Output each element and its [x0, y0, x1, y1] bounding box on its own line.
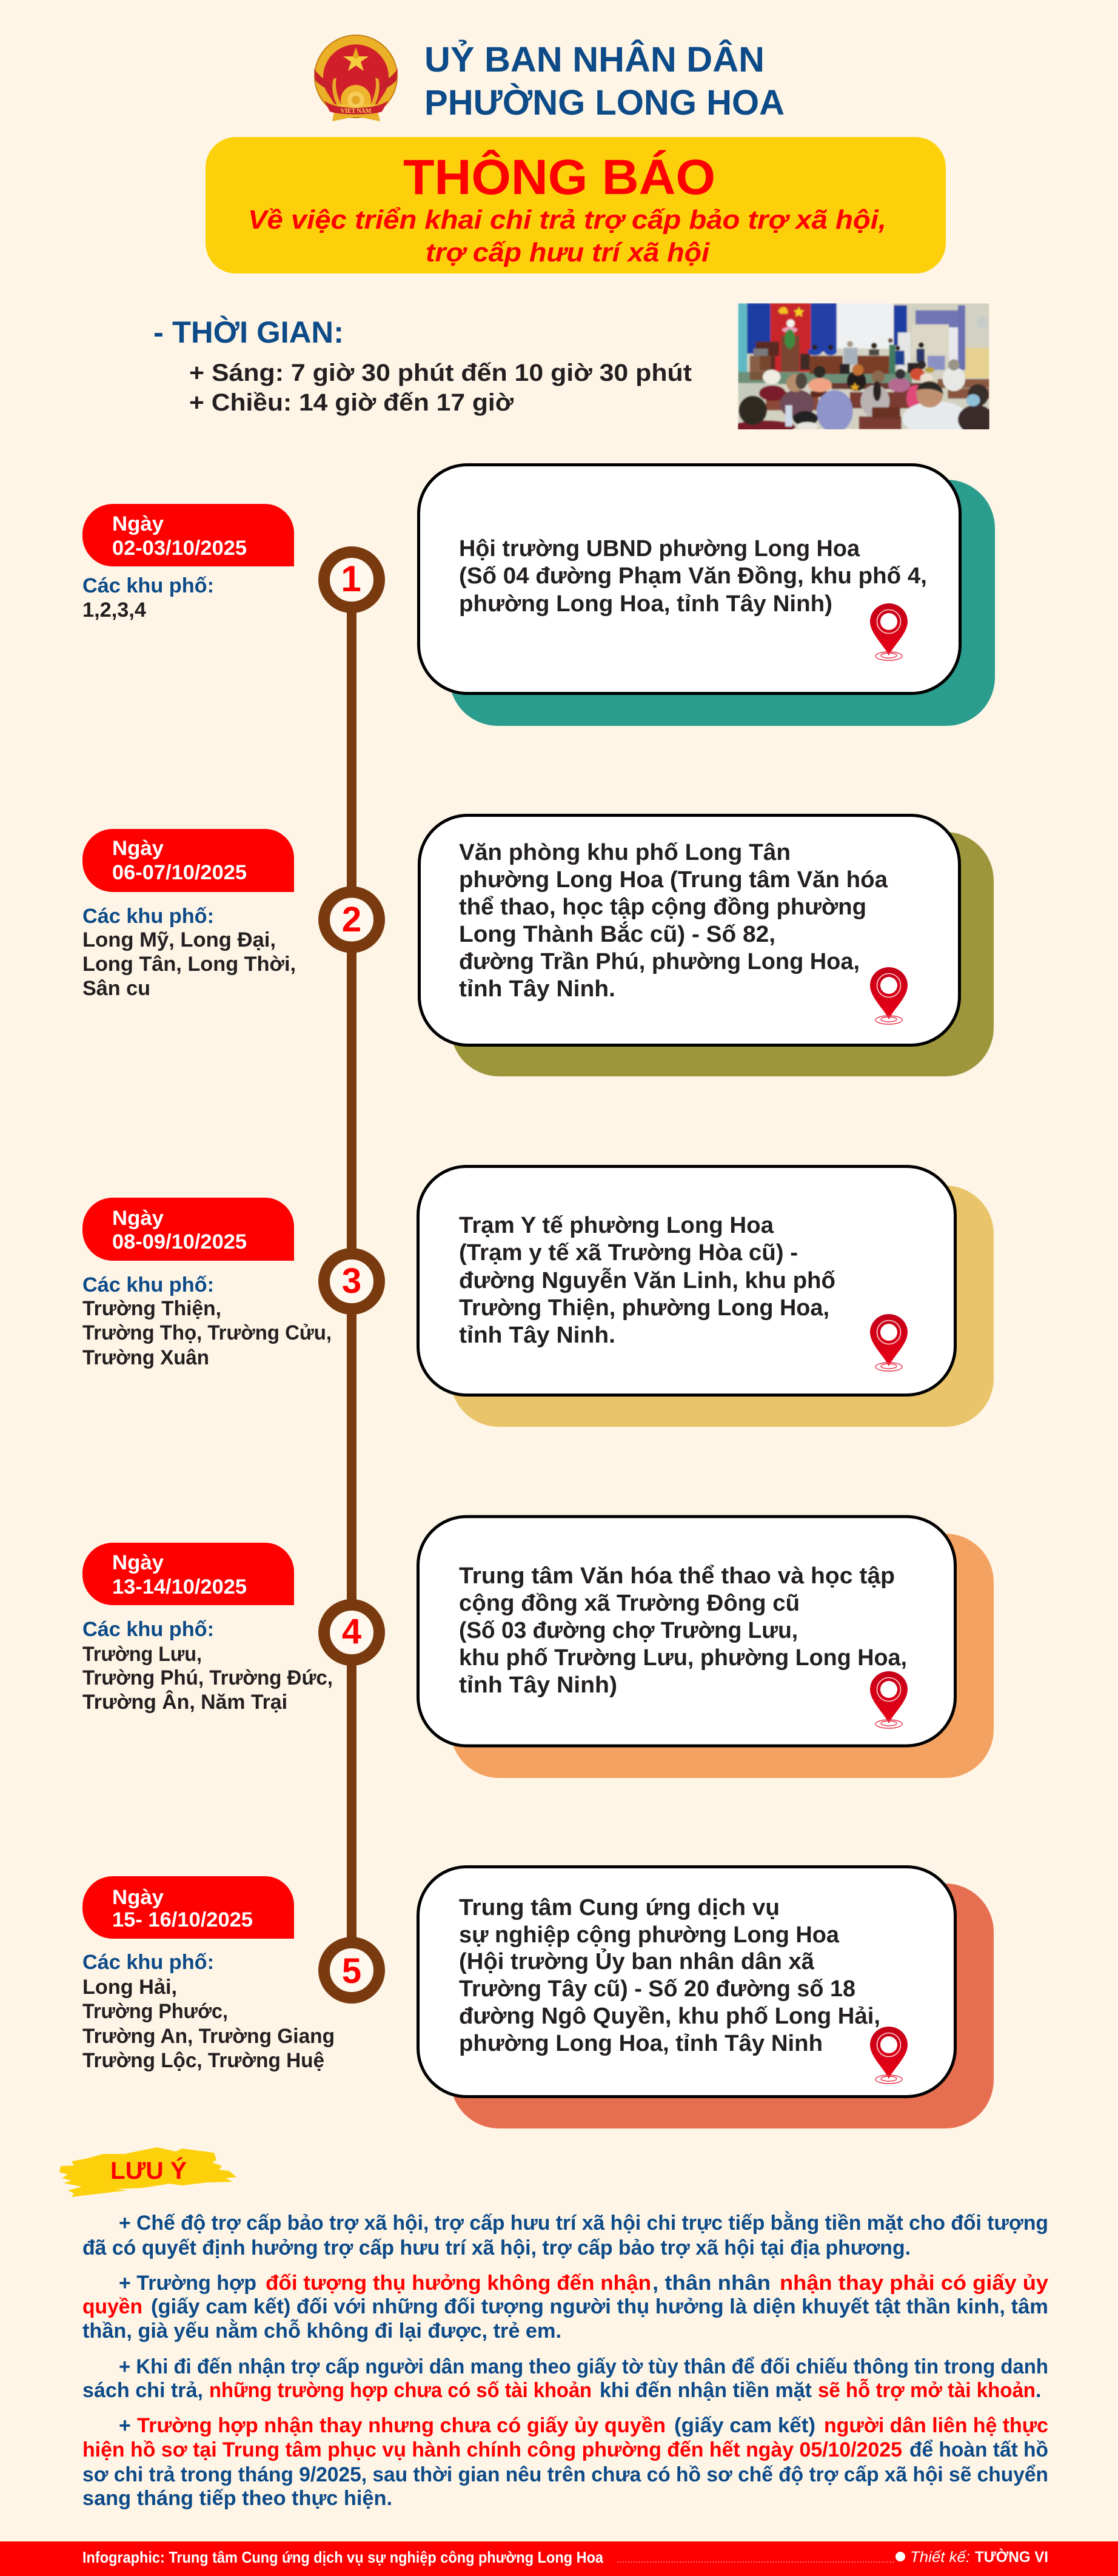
address text: phường Long Hoa, tỉnh Tây Ninh) — [459, 591, 832, 617]
agency name line 2: PHƯỜNG LONG HOA — [424, 83, 785, 122]
neighbourhood label: Các khu phố: — [82, 905, 214, 928]
address text — [459, 1895, 880, 2056]
step 4 — [82, 1517, 994, 1778]
address text: (Số 03 đường chợ Trường Lưu, — [459, 1618, 798, 1643]
number badge — [324, 552, 380, 608]
date text: Ngày — [112, 512, 164, 535]
date value: 08-09/10/2025 — [112, 1230, 247, 1253]
note 3: sẽ hỗ trợ mở tài khoản — [818, 2379, 1036, 2402]
note 4: để hoàn tất hồ — [909, 2438, 1048, 2461]
date value: 02-03/10/2025 — [112, 537, 247, 560]
card shadow — [449, 480, 995, 726]
neighbourhood list — [82, 1297, 332, 1369]
header: emblem and agency name — [314, 35, 785, 122]
address text: đường Ngô Quyền, khu phố Long Hải, — [459, 2004, 880, 2029]
step 3 — [82, 1167, 994, 1427]
address text: Trường Tây cũ) - Số 20 đường số 18 — [459, 1976, 855, 2002]
date text: Ngày — [112, 837, 164, 860]
note 4: (giấy cam kết) — [674, 2414, 815, 2437]
address text: (Hội trường Ủy ban nhân dân xã — [459, 1948, 815, 1974]
photo: meeting hall with residents — [732, 303, 994, 435]
number badge: 2 — [342, 900, 361, 939]
morning hours: + Sáng: 7 giờ 30 phút đến 10 giờ 30 phút — [189, 360, 692, 386]
step 5 — [82, 1867, 994, 2128]
address card — [418, 1517, 956, 1746]
note 4: người dân liên hệ thực — [824, 2414, 1048, 2437]
note 2: (giấy cam kết) đối với những đối tượng người thụ hưởng là diện khuyết tật thần kinh, tâm — [151, 2295, 1048, 2318]
address text: Trung tâm Cung ứng dịch vụ — [459, 1895, 780, 1920]
note 4: sang tháng tiếp theo thực hiện. — [82, 2487, 392, 2510]
note 4 — [82, 2414, 1048, 2510]
address text: Long Thành Bắc cũ) - Số 82, — [459, 921, 775, 947]
note 3: . — [1036, 2379, 1041, 2402]
timeline vertical line — [347, 582, 356, 1971]
neighbourhood list — [82, 1643, 333, 1714]
neighbourhood list: Trường An, Trường Giang — [82, 2025, 335, 2048]
agency name line 1: UỶ BAN NHÂN DÂN — [424, 40, 765, 79]
address card — [418, 1167, 956, 1395]
neighbourhood list: Trường Thiện, — [82, 1297, 221, 1320]
number badge: 1 — [341, 558, 361, 599]
neighbourhood list: Long Tân, Long Thời, — [82, 953, 296, 976]
address text — [459, 536, 927, 617]
date value: 06-07/10/2025 — [112, 861, 247, 884]
note 3: những trường hợp chưa có số tài khoản — [209, 2379, 592, 2402]
note 2: , thân nhân — [652, 2272, 771, 2295]
note 3: sách chi trả, — [82, 2379, 203, 2402]
date text: Ngày — [112, 1551, 164, 1574]
neighbourhood list: Trường Phước, — [82, 2000, 228, 2023]
address text — [459, 1213, 835, 1348]
address card — [418, 465, 960, 694]
date tag — [82, 1876, 294, 1939]
neighbourhood list: Trường Ân, Năm Trại — [82, 1691, 287, 1714]
neighbourhood list — [82, 1976, 335, 2072]
address text: (Trạm y tế xã Trường Hòa cũ) - — [459, 1240, 798, 1266]
date text: Ngày — [112, 1886, 164, 1909]
icon: national emblem of Vietnam: VIET NAM — [341, 108, 372, 115]
number badge: 3 — [342, 1261, 361, 1301]
note 2: quyền — [82, 2295, 142, 2318]
card shadow — [450, 832, 994, 1076]
heading: note on yellow brush stroke — [59, 2147, 236, 2197]
address text: Trạm Y tế phường Long Hoa — [459, 1213, 774, 1238]
text block: notes — [82, 2212, 1048, 2510]
note 4: Trường hợp nhận thay nhưng chưa có giấy ủy quyền — [137, 2414, 666, 2437]
address text — [459, 1563, 907, 1698]
address card — [418, 1867, 956, 2097]
note 1: + Chế độ trợ cấp bảo trợ xã hội, trợ cấp hưu trí xã hội chi trực tiếp bằng tiền mặt cho đối tượng — [119, 2212, 1048, 2235]
neighbourhood list: Trường Lưu, — [82, 1643, 202, 1666]
address text: (Số 04 đường Phạm Văn Đồng, khu phố 4, — [459, 563, 927, 589]
date tag — [82, 1198, 294, 1261]
address text: sự nghiệp cộng phường Long Hoa — [459, 1922, 840, 1948]
date value: 15- 16/10/2025 — [112, 1908, 253, 1931]
neighbourhood label: Các khu phố: — [82, 574, 214, 597]
icon: location pin — [870, 1314, 908, 1371]
address text: Hội trường UBND phường Long Hoa — [459, 536, 860, 562]
note 4: sơ chi trả trong tháng 9/2025, sau thời gian nêu trên chưa có hồ sơ chế độ trợ cấp xã hội sẽ chuyển — [82, 2463, 1048, 2486]
neighbourhood list: 1,2,3,4 — [82, 599, 146, 622]
subtitle line 1: Về việc triển khai chi trả trợ cấp bảo trợ xã hội, — [248, 205, 886, 235]
number badge — [324, 1943, 380, 1997]
icon: location pin — [870, 2027, 908, 2084]
note 1 — [82, 2212, 1048, 2259]
card shadow — [450, 1534, 994, 1778]
address text: tỉnh Tây Ninh) — [459, 1672, 617, 1698]
source credit: Infographic: Trung tâm Cung ứng dịch vụ sự nghiệp công phường Long Hoa — [82, 2548, 603, 2566]
date tag — [82, 829, 294, 892]
note 2: đối tượng thụ hưởng không đến nhận — [266, 2272, 651, 2295]
note 2: nhận thay phải có giấy ủy — [780, 2272, 1048, 2295]
note 1: đã có quyết định hưởng trợ cấp hưu trí xã hội, trợ cấp bảo trợ xã hội tại địa phương. — [82, 2236, 911, 2259]
neighbourhood list: Long Hải, — [82, 1976, 177, 1999]
date tag — [82, 504, 294, 566]
address text: phường Long Hoa, tỉnh Tây Ninh — [459, 2031, 823, 2056]
heading: notice: THÔNG BÁO — [403, 150, 715, 205]
heading: note on yellow brush stroke: LƯU Ý — [110, 2156, 187, 2184]
number badge — [324, 892, 380, 947]
text block: time schedule — [153, 315, 692, 416]
address text: tỉnh Tây Ninh. — [459, 976, 615, 1002]
number badge — [324, 1254, 380, 1309]
address text: Trung tâm Văn hóa thể thao và học tập — [459, 1563, 895, 1589]
neighbourhood list: Trường Xuân — [82, 1346, 209, 1369]
date text: Ngày — [112, 1207, 164, 1230]
address text: cộng đồng xã Trường Đông cũ — [459, 1591, 800, 1616]
neighbourhood list: Long Mỹ, Long Đại, — [82, 928, 276, 951]
address text: đường Trần Phú, phường Long Hoa, — [459, 949, 860, 974]
footer bar — [0, 2541, 1118, 2576]
note 2: thần, già yếu nằm chỗ không đi lại được, trẻ em. — [82, 2319, 561, 2343]
date value: 13-14/10/2025 — [112, 1575, 247, 1598]
icon: national emblem of Vietnam — [314, 35, 398, 121]
note 4: hiện hồ sơ tại Trung tâm phục vụ hành chính công phường đến hết ngày 05/10/2025 — [82, 2438, 902, 2461]
neighbourhood label: Các khu phố: — [82, 1273, 214, 1296]
address text: thể thao, học tập cộng đồng phường — [459, 894, 866, 920]
address text: Trường Thiện, phường Long Hoa, — [459, 1295, 829, 1321]
number badge: 4 — [342, 1612, 361, 1651]
address text — [459, 840, 888, 1002]
neighbourhood label: Các khu phố: — [82, 1618, 214, 1641]
icon: national emblem of Vietnam: CỘNG HÒA XÃ HỘI CHỦ NGHĨA — [338, 104, 374, 107]
number badge — [324, 1605, 380, 1660]
panel: yellow notice banner — [206, 137, 946, 273]
subtitle line 2: trợ cấp hưu trí xã hội — [426, 238, 710, 267]
number badge: 5 — [342, 1951, 361, 1991]
neighbourhood list: Trường Phú, Trường Đức, — [82, 1666, 333, 1689]
designer name: TƯỜNG VI — [975, 2547, 1048, 2566]
neighbourhood list: Trường Thọ, Trường Cửu, — [82, 1321, 332, 1344]
icon: location pin — [870, 603, 908, 660]
neighbourhood list: Sân cu — [82, 977, 150, 1000]
neighbourhood list — [82, 928, 296, 1000]
card shadow — [450, 1883, 994, 2128]
neighbourhood list: Trường Lộc, Trường Huệ — [82, 2049, 324, 2072]
icon: location pin — [870, 967, 908, 1024]
address text: khu phố Trường Lưu, phường Long Hoa, — [459, 1645, 907, 1671]
note 3 — [82, 2355, 1048, 2402]
icon: location pin — [870, 1671, 908, 1728]
address text: đường Nguyễn Văn Linh, khu phố — [459, 1267, 835, 1293]
note 3: + Khi đi đến nhận trợ cấp người dân mang theo giấy tờ tùy thân để đối chiếu thông tin trong danh — [119, 2355, 1048, 2378]
address text: tỉnh Tây Ninh. — [459, 1323, 615, 1348]
step 1 — [82, 465, 995, 726]
date tag — [82, 1543, 294, 1605]
address card — [420, 815, 959, 1045]
card shadow — [450, 1186, 994, 1427]
note 2: + Trường hợp — [119, 2272, 256, 2295]
afternoon hours: + Chiều: 14 giờ đến 17 giờ — [189, 389, 514, 416]
note 4: + — [119, 2414, 131, 2437]
note 2 — [82, 2272, 1048, 2343]
note 3: khi đến nhận tiền mặt — [600, 2379, 812, 2402]
step 2 — [82, 815, 994, 1076]
address text: phường Long Hoa (Trung tâm Văn hóa — [459, 867, 888, 893]
designer credit label: Thiết kế: — [910, 2549, 970, 2566]
heading: time: - THỜI GIAN: — [153, 315, 344, 349]
neighbourhood label: Các khu phố: — [82, 1951, 214, 1974]
address text: Văn phòng khu phố Long Tân — [459, 840, 791, 865]
